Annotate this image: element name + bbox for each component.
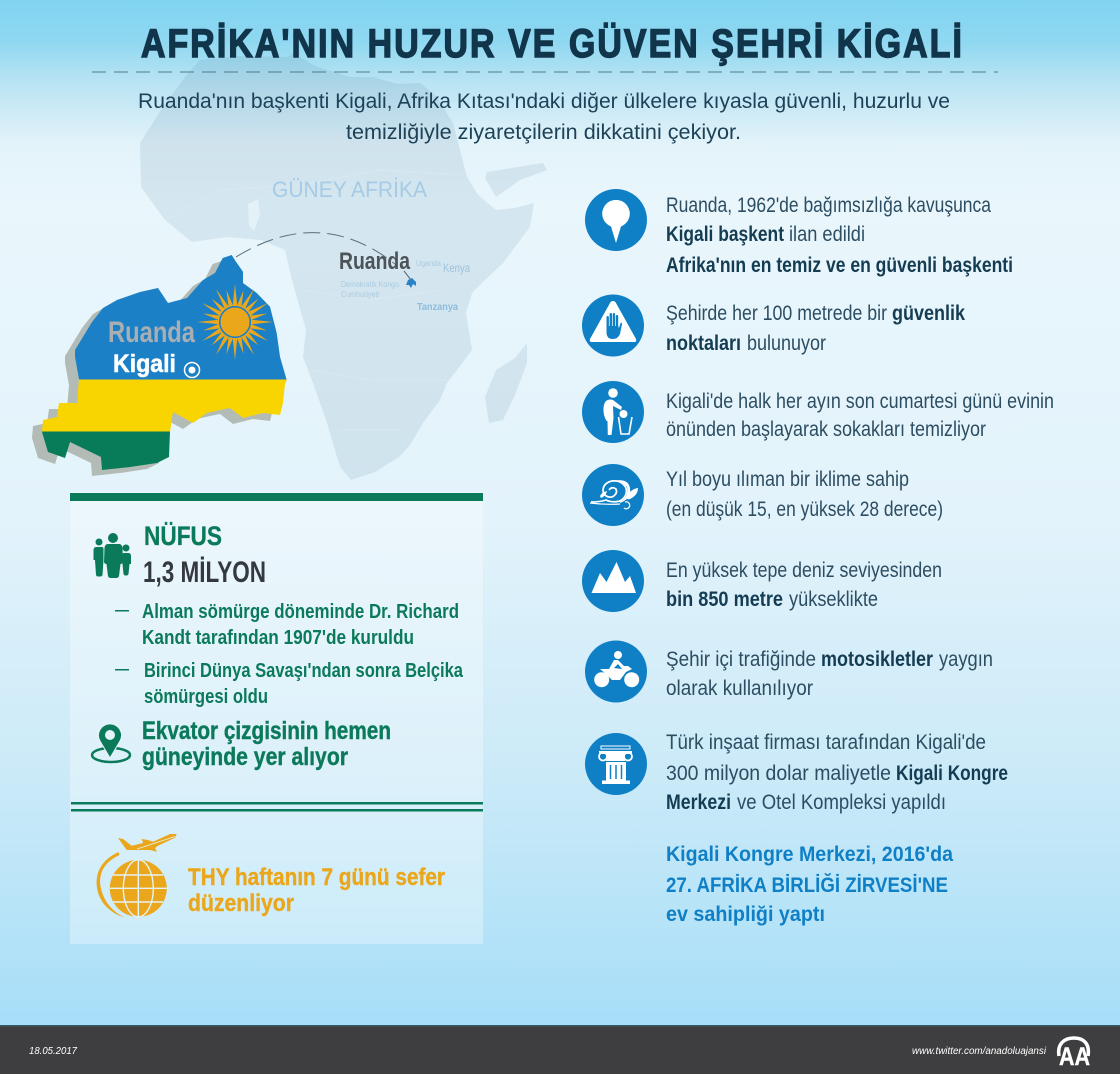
summit callout: 27. AFRİKA BİRLİĞİ ZİRVESİ'NE — [666, 873, 948, 897]
equator note: güneyinde yer alıyor — [142, 743, 348, 771]
fact 2: security: bulunuyor — [747, 332, 826, 355]
flag labels: Ruanda — [108, 316, 195, 349]
history bullets: sömürgesi oldu — [144, 686, 268, 708]
fact 7: congress center: Kigali Kongre — [896, 762, 1008, 785]
fact 7: congress center: Merkezi — [666, 791, 731, 814]
icon: location pin — [92, 724, 130, 762]
icon: person with bin — [582, 381, 644, 443]
fact 6: traffic: olarak kullanılıyor — [666, 677, 813, 700]
icon: map pin — [585, 189, 647, 251]
map labels: Tanzanya — [417, 302, 458, 313]
fact 2: security: Şehirde her 100 metrede bir — [666, 302, 887, 325]
icon: motorcycle — [585, 640, 647, 702]
fact 1: capital: Kigali başkent — [666, 223, 784, 246]
fact 7: congress center: 300 milyon dolar maliyetle — [666, 762, 891, 785]
icon: globe and plane — [96, 834, 177, 918]
subtitle — [138, 90, 950, 144]
icon: swirl and leaves — [582, 464, 644, 526]
fact 2: security: güvenlik — [892, 302, 965, 325]
logo: AA: AA — [1059, 1043, 1090, 1071]
fact 6: traffic: yaygın — [939, 648, 993, 671]
fact 1: capital: ilan edildi — [789, 223, 865, 246]
map of Africa — [140, 53, 547, 480]
map labels: GÜNEY AFRİKA — [272, 177, 427, 202]
fact 1: capital: Ruanda, 1962'de bağımsızlığa kavuşunca — [666, 194, 991, 217]
fact 3: cleaning: Kigali'de halk her ayın son cumartesi günü evinin — [666, 390, 1054, 413]
fact 1: capital — [585, 189, 1013, 277]
icon: mountains — [582, 550, 644, 612]
fact 3: cleaning: önünden başlayarak sokakları temizliyor — [666, 418, 986, 441]
source url: www.twitter.com/anadoluajansi — [912, 1046, 1047, 1057]
equator note: Ekvator çizgisinin hemen — [142, 717, 391, 745]
footer — [0, 1025, 1120, 1074]
fact 5: altitude — [582, 550, 942, 612]
fact 4: climate — [582, 464, 943, 526]
history bullets — [115, 601, 464, 708]
icon: people — [94, 533, 131, 578]
fact 5: altitude: bin 850 metre — [666, 588, 783, 611]
date: 18.05.2017 — [29, 1046, 77, 1057]
fact 1: capital: Afrika'nın en temiz ve en güvenli başkenti — [666, 254, 1013, 277]
map labels: Demokratik Kongo — [341, 280, 399, 289]
fact 6: traffic: motosikletler — [821, 648, 933, 671]
icon: column — [585, 733, 647, 795]
subtitle: temizliğiyle ziyaretçilerin dikkatini çekiyor. — [346, 121, 741, 144]
fact 2: security: noktaları — [666, 332, 741, 355]
history bullets: Kandt tarafından 1907'de kuruldu — [142, 627, 414, 649]
small Rwanda marker and dashed arc — [236, 233, 416, 288]
map labels: Cumhuriyeti — [341, 290, 379, 299]
subtitle: Ruanda'nın başkenti Kigali, Afrika Kıtası'ndaki diğer ülkelere kıyasla güvenli, huzurlu ve — [138, 90, 950, 113]
fact 7: congress center: Türk inşaat firması tarafından Kigali'de — [666, 731, 986, 754]
THY note: düzenliyor — [188, 890, 294, 917]
title: AFRİKA'NIN HUZUR VE GÜVEN ŞEHRİ KİGALİ — [141, 21, 964, 66]
flag sun — [197, 284, 273, 360]
fact 5: altitude: yükseklikte — [789, 588, 878, 611]
history bullets: Alman sömürge döneminde Dr. Richard — [142, 601, 459, 623]
map labels: Ruanda — [339, 248, 411, 275]
fact 7: congress center — [585, 731, 1008, 814]
summit callout: ev sahipliği yaptı — [666, 903, 825, 926]
fact 6: traffic: Şehir içi trafiğinde — [666, 648, 816, 671]
fact 6: traffic — [585, 640, 993, 702]
population value: 1,3 MİLYON — [143, 556, 266, 589]
panel: facts — [70, 492, 483, 944]
fact 3: cleaning — [582, 381, 1054, 443]
Rwanda flag map — [30, 250, 300, 476]
Rwanda flag map: Kigali — [113, 350, 176, 378]
fact 4: climate: Yıl boyu ılıman bir iklime sahip — [666, 468, 909, 491]
title divider — [92, 71, 998, 73]
summit callout: Kigali Kongre Merkezi, 2016'da — [666, 843, 953, 866]
THY note — [188, 864, 445, 917]
fact 7: congress center: ve Otel Kompleksi yapıldı — [737, 791, 946, 814]
Kigali marker — [184, 362, 200, 378]
map labels — [272, 177, 470, 313]
map labels: Uganda — [416, 259, 441, 268]
map labels: Kenya — [443, 261, 470, 275]
fact 2: security — [582, 294, 965, 356]
equator note — [142, 717, 391, 771]
fact 5: altitude: En yüksek tepe deniz seviyesinden — [666, 559, 942, 582]
population heading: NÜFUS — [144, 521, 222, 551]
THY note: THY haftanın 7 günü sefer — [188, 864, 445, 891]
history bullets: Birinci Dünya Savaşı'ndan sonra Belçika — [144, 660, 464, 682]
fact 4: climate: (en düşük 15, en yüksek 28 derece) — [666, 498, 943, 521]
summit callout — [666, 843, 953, 926]
icon: stop hand — [582, 294, 644, 356]
